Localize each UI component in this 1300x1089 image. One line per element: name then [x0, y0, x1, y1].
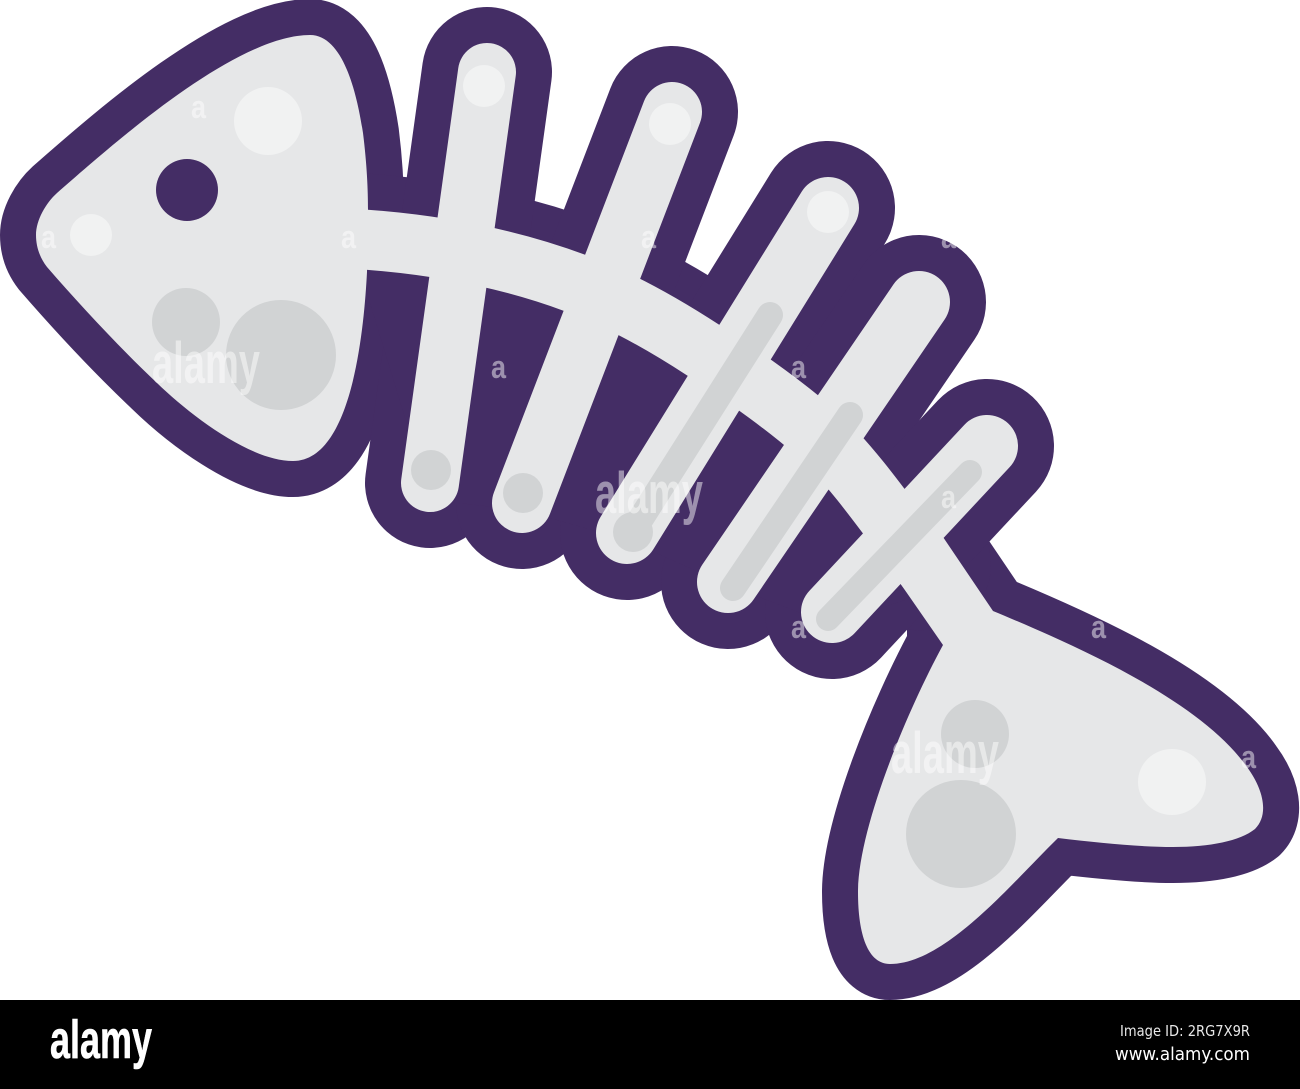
watermarks: a: [941, 219, 956, 255]
footer bar: [0, 1000, 1300, 1089]
watermarks: a: [41, 219, 56, 255]
watermarks: a: [641, 219, 656, 255]
watermarks: a: [491, 349, 506, 385]
watermarks: [41, 89, 1256, 786]
watermarks: a: [341, 219, 356, 255]
image id: Image ID: 2RG7X9R: [1120, 1022, 1250, 1040]
tail: [858, 537, 1263, 964]
ribs: [430, 72, 987, 612]
watermarks: a: [791, 609, 806, 645]
rib shading stripes: [640, 315, 970, 619]
watermarks: a: [941, 479, 956, 515]
watermarks: a: [1091, 609, 1106, 645]
watermarks: a: [191, 89, 206, 125]
watermarks: a: [1241, 739, 1256, 775]
watermarks: alamy: [152, 331, 260, 396]
head: [36, 35, 368, 461]
website: www.alamy.com: [1115, 1044, 1250, 1065]
watermarks: a: [791, 349, 806, 385]
watermarks: alamy: [891, 721, 999, 786]
light spots: [70, 65, 1206, 815]
dark spots: [152, 288, 1016, 888]
spine: [340, 238, 935, 580]
footer logo: alamy: [50, 1010, 152, 1070]
eye: [156, 159, 218, 221]
watermarks: alamy: [595, 461, 703, 526]
